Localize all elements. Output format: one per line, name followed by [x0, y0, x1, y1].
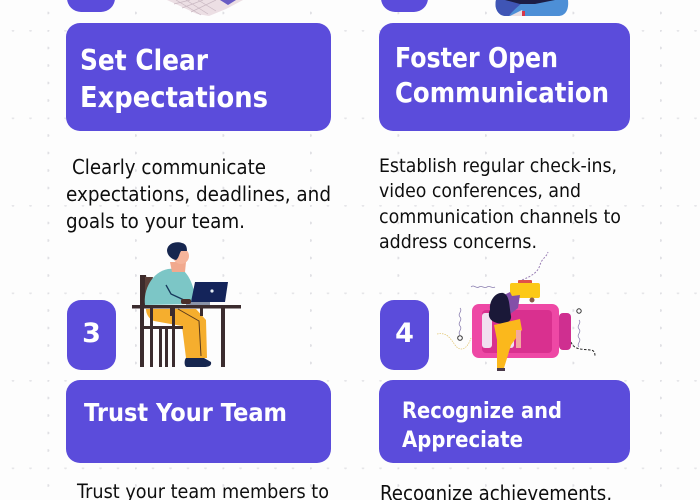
- heading panel: Trust Your Team: Trust Your Team: [84, 398, 287, 427]
- text block: set clear expectations: [66, 155, 331, 233]
- heading panel: Set Clear Expectations: Set Clear: [80, 44, 208, 77]
- number badge 3: 3: [82, 318, 101, 349]
- icon: isometric calendar: [167, 0, 243, 16]
- text block: foster open communication: video conferences, and: [379, 180, 581, 202]
- heading panel: Set Clear Expectations: Expectations: [80, 81, 268, 114]
- text block: set clear expectations: expectations, deadlines, and: [66, 182, 331, 206]
- icon: seated person legs: [495, 0, 568, 16]
- number badge 4: [380, 300, 429, 370]
- text block: foster open communication: [379, 155, 621, 253]
- number badge 2: [381, 0, 428, 12]
- number badge 4: 4: [395, 318, 414, 349]
- heading panel: Foster Open Communication: Communication: [395, 77, 609, 109]
- text block: set clear expectations: Clearly communicate: [72, 155, 266, 179]
- text block: set clear expectations: goals to your team.: [66, 209, 245, 233]
- text block: foster open communication: address concerns.: [379, 231, 537, 253]
- heading panel: Recognize and Appreciate: [379, 380, 630, 463]
- heading panel: Recognize and Appreciate: Appreciate: [402, 428, 523, 453]
- icon: woman lifting case on battery: [437, 252, 595, 371]
- heading panel: Set Clear Expectations: [66, 23, 331, 131]
- heading panel: Foster Open Communication: [379, 23, 630, 131]
- heading panel: Foster Open Communication: Foster Open: [395, 42, 558, 74]
- text block: foster open communication: Establish regular check-ins,: [379, 155, 617, 177]
- number badge 1: [67, 0, 115, 12]
- heading panel: Recognize and Appreciate: Recognize and: [402, 399, 562, 424]
- heading panel: Trust Your Team: [66, 380, 331, 463]
- number badge 3: [67, 300, 116, 370]
- text block: foster open communication: communication channels to: [379, 206, 621, 228]
- icon: man working at laptop: [132, 242, 241, 367]
